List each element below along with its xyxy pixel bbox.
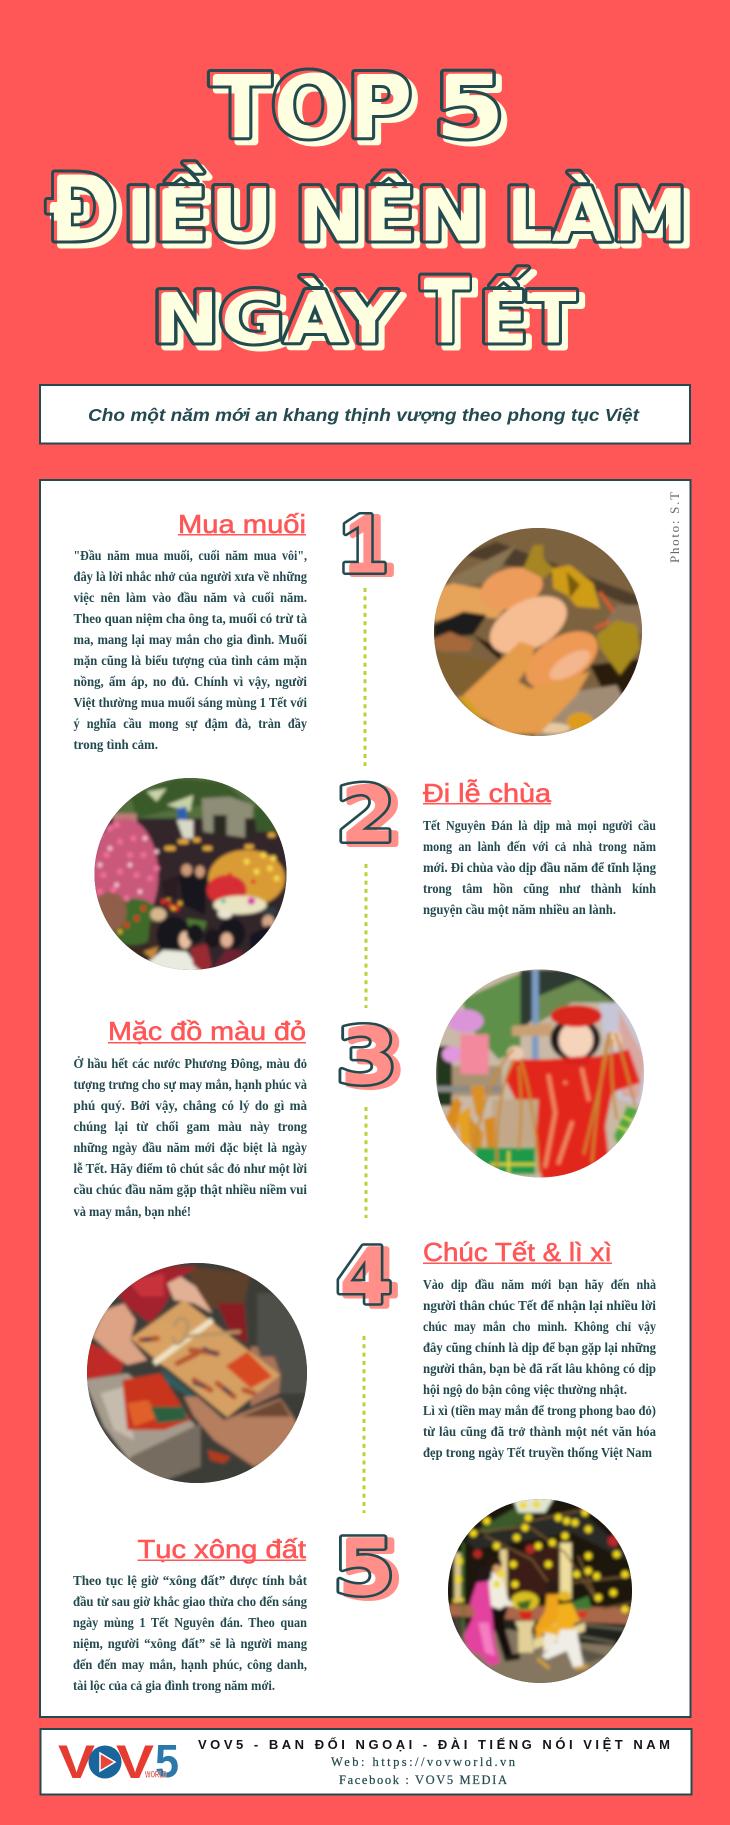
text: Đi lễ chùa: trong tâm hồn cũng như thành kính: [423, 881, 656, 896]
text: Mua muối: mặn cũng là biểu tượng của tình cảm mặn: [74, 653, 307, 668]
text: Mua muối: ma, mang lại may mắn cho gia đình. Muối: [74, 632, 307, 647]
text: Tục xông đất: ngày mùng 1 Tết Nguyên đán. Theo quan: [73, 1615, 307, 1630]
text: Mua muối: đây là lời nhắc nhở của người xưa về những: [74, 569, 307, 584]
text: Tục xông đất: [73, 1573, 307, 1693]
photo credit: Photo: S.T: [667, 492, 682, 563]
title line: Điều nên làm: [44, 159, 690, 250]
text: Mặc đồ màu đỏ: chúng lại từ chối gam màu này trong: [74, 1119, 307, 1134]
number 5: 5: [340, 1524, 402, 1616]
text: Mua muối: trong tình cảm.: [74, 737, 158, 752]
title line: Ngày Tết: ẾT: [485, 273, 582, 364]
text: Mặc đồ màu đỏ: phú quý. Bởi vậy, chẳng có lý do gì mà: [74, 1098, 307, 1113]
text: Mặc đồ màu đỏ: và may mắn, bạn nhé!: [74, 1204, 191, 1219]
number 1: 1: [347, 499, 393, 592]
heading: Mặc đồ màu đỏ: Mặc đồ màu đỏ: [108, 1016, 306, 1046]
photo: girl in red ao dai: [432, 966, 648, 1182]
title line: Ngày Tết: [155, 264, 586, 352]
number 1: [342, 512, 394, 577]
title line: TOP 5: [206, 68, 508, 146]
text: Tục xông đất: đầu từ sau giờ khắc giao thừa cho đến sáng: [73, 1594, 307, 1609]
number 3: [338, 1022, 401, 1090]
text: Mặc đồ màu đỏ: lễ Tết. Hãy điểm tô chút sắc đỏ như một lời: [74, 1161, 307, 1176]
text: Mua muối: Việt thường mua muối sáng mùng 1 Tết với: [74, 695, 307, 710]
photo: handing over a gift: [84, 1260, 310, 1486]
title line: Ngày Tết: T: [426, 264, 476, 369]
text: Đi lễ chùa: nguyện cầu một năm nhiều an lành.: [423, 902, 616, 917]
text: Chúc Tết & lì xì: từ lâu cũng đã trở thành một nét văn hóa: [423, 1424, 656, 1439]
title line: TOP 5: TOP: [216, 60, 418, 163]
photo: crowd at pagoda with flowers: [90, 775, 290, 975]
heading: Tục xông đất: Tục xông đất: [138, 1534, 307, 1564]
logo: VOV5 World: V: [116, 1735, 155, 1788]
logo: VOV5 World: [58, 1735, 179, 1788]
heading: Chúc Tết & lì xì: Chúc Tết & lì xì: [423, 1237, 612, 1267]
text: Tục xông đất: Theo tục lệ giờ “xông đất” được tính bắt: [73, 1573, 307, 1588]
footer web line: Web: https://vovworld.vn: [331, 1755, 516, 1769]
title: [35, 60, 695, 369]
subtitle box: [40, 385, 690, 444]
text: Mua muối: ý nghĩa cầu mong sự đậm đà, tràn đầy: [74, 716, 307, 731]
photo: salt bags in hands: [430, 525, 646, 741]
number 2: 2: [343, 773, 403, 863]
title line: Điều nên làm: LÀM: [510, 177, 693, 263]
text: Đi lễ chùa: Tết Nguyên Đán là dịp mà mọi người cầu: [423, 818, 656, 833]
number 2: [339, 780, 398, 847]
footer box: [40, 1729, 692, 1794]
text: Tục xông đất: niệm, người “xông đất” sẽ là người mang: [73, 1636, 307, 1651]
text: Chúc Tết & lì xì: hội ngộ do bận công việc thường nhật.: [423, 1382, 627, 1397]
text: Chúc Tết & lì xì: đẹp trong ngày Tết truyền thống Việt Nam: [423, 1445, 653, 1460]
title line: Điều nên làm: Đ: [52, 160, 123, 267]
footer organisation line: VOV5 - BAN ĐỐI NGOẠI - ĐÀI TIẾNG NÓI VIỆT NAM: [198, 1737, 670, 1752]
number 3: 3: [343, 1014, 404, 1105]
text: Chúc Tết & lì xì: người thân chúc Tết để nhận lại nhiều lời: [423, 1298, 656, 1313]
title line: Điều nên làm: IỀU: [129, 168, 279, 263]
footer facebook line: Facebook : VOV5 MEDIA: [339, 1773, 507, 1787]
title line: Ngày Tết: NGÀY: [158, 282, 403, 364]
text: Đi lễ chùa: mới. Đi chùa vào dịp đầu năm để tĩnh lặng: [423, 860, 656, 875]
dotted connector 2: [364, 864, 368, 1008]
dotted connector 1: [364, 588, 366, 766]
text: Chúc Tết & lì xì: chúc may mắn cho mình. Không chỉ vậy: [423, 1319, 656, 1334]
text: Mặc đồ màu đỏ: những ngày đầu năm mới đặc biệt là ngày: [74, 1140, 307, 1155]
logo: VOV5 World: V: [58, 1735, 96, 1788]
heading: Mua muối: Mua muối: [178, 509, 306, 539]
text: Chúc Tết & lì xì: Vào dịp đầu năm mới bạn hãy đến nhà: [423, 1277, 656, 1292]
text: Mua muối: nồng, ấm áp, no đủ. Chính vì vậy, người: [74, 674, 307, 689]
text: Mua muối: "Đầu năm mua muối, cuối năm mua vôi",: [74, 548, 307, 563]
text: Chúc Tết & lì xì: đây cũng chính là dịp để bạn gặp lại những: [423, 1340, 656, 1355]
panel: main content: [40, 480, 690, 1717]
title line: Điều nên làm: NÊN: [301, 177, 489, 263]
text: Mặc đồ màu đỏ: [74, 1056, 307, 1219]
number 4: 4: [342, 1233, 398, 1325]
text: Mua muối: [74, 548, 307, 752]
title line: TOP 5: 5: [439, 62, 510, 163]
text: Tục xông đất: tài lộc của cả gia đình trong năm mới.: [73, 1678, 275, 1693]
text: Mua muối: việc nên làm vào đầu năm và cuối năm.: [74, 590, 307, 605]
number 5: [336, 1534, 400, 1601]
text: Đi lễ chùa: mong an lành đến với cả nhà trong năm: [423, 839, 657, 854]
text: Chúc Tết & lì xì: người thân, bạn bè đã rất lâu không có dịp: [423, 1361, 656, 1376]
photo: family visiting under apricot blossom: [445, 1496, 635, 1686]
text: Chúc Tết & lì xì: Lì xì (tiền may mắn để trong phong bao đỏ): [423, 1403, 656, 1418]
logo: VOV5 World: WORLD: [145, 1770, 167, 1780]
dotted connector 4: [362, 1336, 366, 1513]
logo: VOV5 World: 5: [155, 1735, 179, 1787]
subtitle text: Cho một năm mới an khang thịnh vượng theo phong tục Việt: [88, 405, 640, 425]
number 4: [336, 1243, 398, 1309]
text: Mặc đồ màu đỏ: Ở hầu hết các nước Phương Đông, màu đỏ: [74, 1056, 307, 1071]
heading: Đi lễ chùa: Đi lễ chùa: [423, 778, 552, 808]
text: Chúc Tết & lì xì: [423, 1277, 656, 1460]
text: Tục xông đất: đến đến may mắn, hạnh phúc, công danh,: [73, 1657, 307, 1672]
text: Mua muối: Theo quan niệm cha ông ta, muối có trừ tà: [74, 611, 307, 626]
text: Đi lễ chùa: [423, 818, 657, 917]
text: Mặc đồ màu đỏ: tượng trưng cho sự may mắn, hạnh phúc và: [74, 1077, 307, 1092]
text: Mặc đồ màu đỏ: cầu chúc đầu năm gặp thật nhiều niềm vui: [74, 1182, 307, 1197]
dotted connector 3: [364, 1107, 368, 1218]
